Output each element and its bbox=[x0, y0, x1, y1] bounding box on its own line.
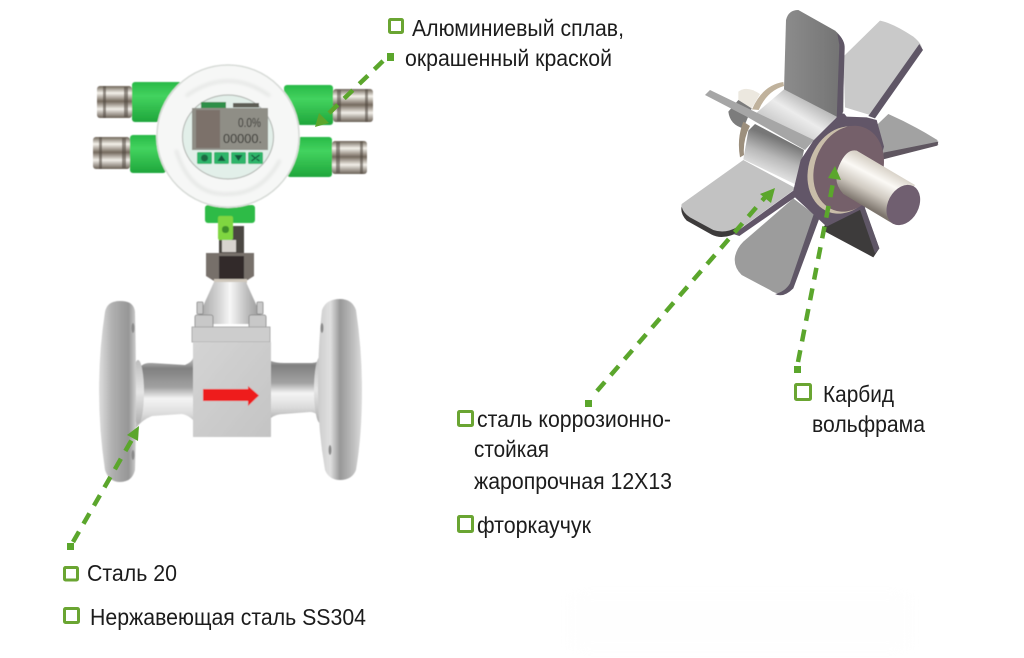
label: impeller steel and fluororubber: стойкая bbox=[474, 436, 549, 462]
keypad buttons bbox=[197, 152, 263, 164]
bolts bbox=[195, 302, 266, 328]
leader line: steel flange bbox=[67, 426, 139, 550]
top blade bbox=[784, 10, 844, 125]
flange bolt holes bbox=[132, 323, 332, 460]
lower-left blade bbox=[681, 160, 796, 235]
label: steel materials bbox=[64, 560, 366, 630]
drum lower bbox=[743, 124, 804, 185]
icon: checkbox bullet bbox=[458, 516, 472, 532]
rear shaft bbox=[728, 82, 784, 157]
leader line: tungsten carbide bbox=[794, 166, 841, 373]
right flange bbox=[318, 299, 362, 480]
left flange bbox=[99, 301, 136, 482]
faint background smudge bbox=[560, 585, 920, 658]
label: impeller steel and fluororubber: жаропрочная 12Х13 bbox=[474, 468, 672, 494]
label: impeller steel and fluororubber bbox=[458, 406, 672, 538]
icon: checkbox bullet bbox=[64, 568, 78, 580]
display window bbox=[182, 95, 274, 179]
cap plate bbox=[192, 327, 270, 342]
icon: checkbox bullet bbox=[390, 20, 402, 32]
right flange neck bbox=[314, 357, 326, 423]
left flange neck bbox=[132, 360, 144, 424]
left pipe bbox=[136, 358, 193, 428]
label: impeller steel and fluororubber: сталь коррозионно- bbox=[477, 406, 671, 432]
cable glands bbox=[93, 86, 373, 174]
front shaft bbox=[836, 150, 915, 224]
icon: checkbox bullet bbox=[64, 608, 78, 622]
icon: red flow arrow bbox=[203, 386, 259, 406]
leader line: corrosion resistant steel bbox=[585, 188, 775, 407]
label: aluminium alloy: Алюминиевый сплав, bbox=[412, 15, 624, 41]
green neck bbox=[205, 205, 255, 240]
lcd readout: 0.0% bbox=[238, 115, 261, 130]
leader line: aluminium alloy bbox=[315, 61, 383, 127]
label: aluminium alloy bbox=[387, 15, 624, 71]
icon: checkbox bullet bbox=[796, 384, 810, 400]
lower blade bbox=[735, 198, 817, 293]
right pipe bbox=[271, 356, 324, 420]
label: tungsten carbide: Карбид bbox=[823, 381, 895, 407]
label: aluminium alloy: окрашенный краской bbox=[405, 45, 612, 71]
lcd readout: 00000. bbox=[223, 131, 262, 146]
icon: checkbox bullet bbox=[458, 412, 472, 426]
lcd screen bbox=[192, 108, 268, 150]
right blade bbox=[873, 114, 938, 157]
label: steel materials: Нержавеющая сталь SS304 bbox=[90, 604, 366, 630]
left thin blade bbox=[705, 90, 814, 150]
upper-right blade bbox=[843, 21, 922, 116]
lower-right dark blade bbox=[823, 200, 879, 257]
impeller illustration bbox=[681, 10, 938, 295]
white housing ring bbox=[156, 64, 300, 208]
cone bbox=[195, 282, 265, 324]
label: tungsten carbide bbox=[796, 381, 925, 437]
label: steel materials: Сталь 20 bbox=[87, 560, 177, 586]
label: impeller steel and fluororubber: фторкаучук bbox=[477, 512, 592, 538]
hub star bbox=[733, 113, 884, 236]
lcd readout bbox=[223, 115, 262, 146]
tungsten carbide washer bbox=[796, 116, 892, 224]
brand strip bbox=[201, 102, 226, 108]
label: tungsten carbide: вольфрама bbox=[812, 411, 925, 437]
sensor block bbox=[193, 342, 271, 437]
green housing arms bbox=[130, 82, 333, 177]
drum upper bbox=[755, 89, 837, 142]
stem and hex nut bbox=[206, 226, 254, 283]
flow meter illustration bbox=[93, 64, 373, 482]
